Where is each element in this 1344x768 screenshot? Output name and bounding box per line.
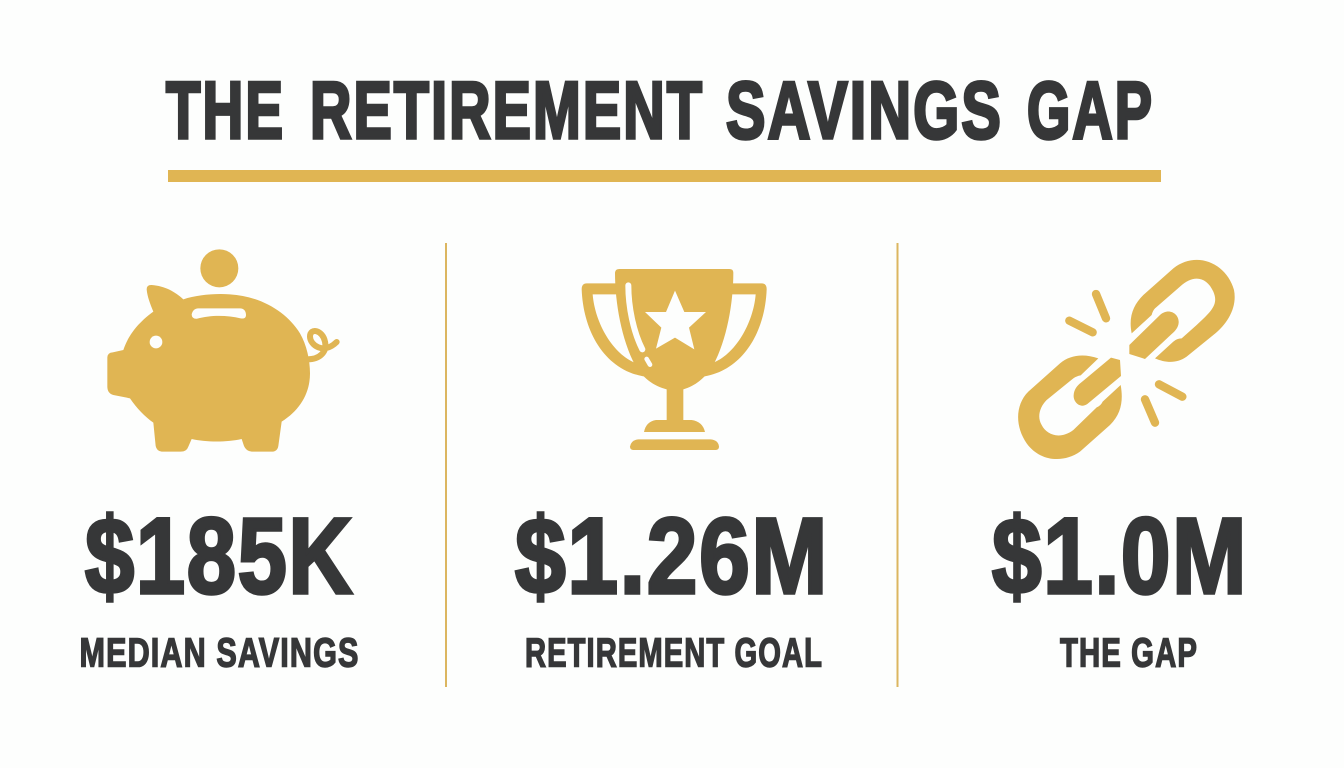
label: the gap: THE GAP xyxy=(1060,630,1198,676)
label: median savings: MEDIAN SAVINGS xyxy=(80,630,360,676)
stat: $1.26M: $1.26M xyxy=(515,495,829,616)
icon: piggy bank with coin xyxy=(107,249,337,452)
stat: $185K: $185K xyxy=(85,495,354,616)
title: GAP xyxy=(1027,66,1154,156)
panel: the gap xyxy=(992,260,1248,676)
label: retirement goal: RETIREMENT GOAL xyxy=(525,630,823,676)
divider left xyxy=(445,243,447,687)
panel: median savings xyxy=(80,249,360,675)
title xyxy=(166,66,1154,156)
title: SAVINGS xyxy=(726,66,1003,156)
title underline xyxy=(168,170,1161,182)
title: THE xyxy=(166,66,285,156)
divider right xyxy=(896,243,898,687)
icon: broken chain link xyxy=(1018,260,1235,459)
panel: retirement goal xyxy=(515,269,829,676)
stat: $1.0M: $1.0M xyxy=(992,495,1248,616)
icon: trophy with star xyxy=(582,269,767,450)
title: RETIREMENT xyxy=(310,66,704,156)
